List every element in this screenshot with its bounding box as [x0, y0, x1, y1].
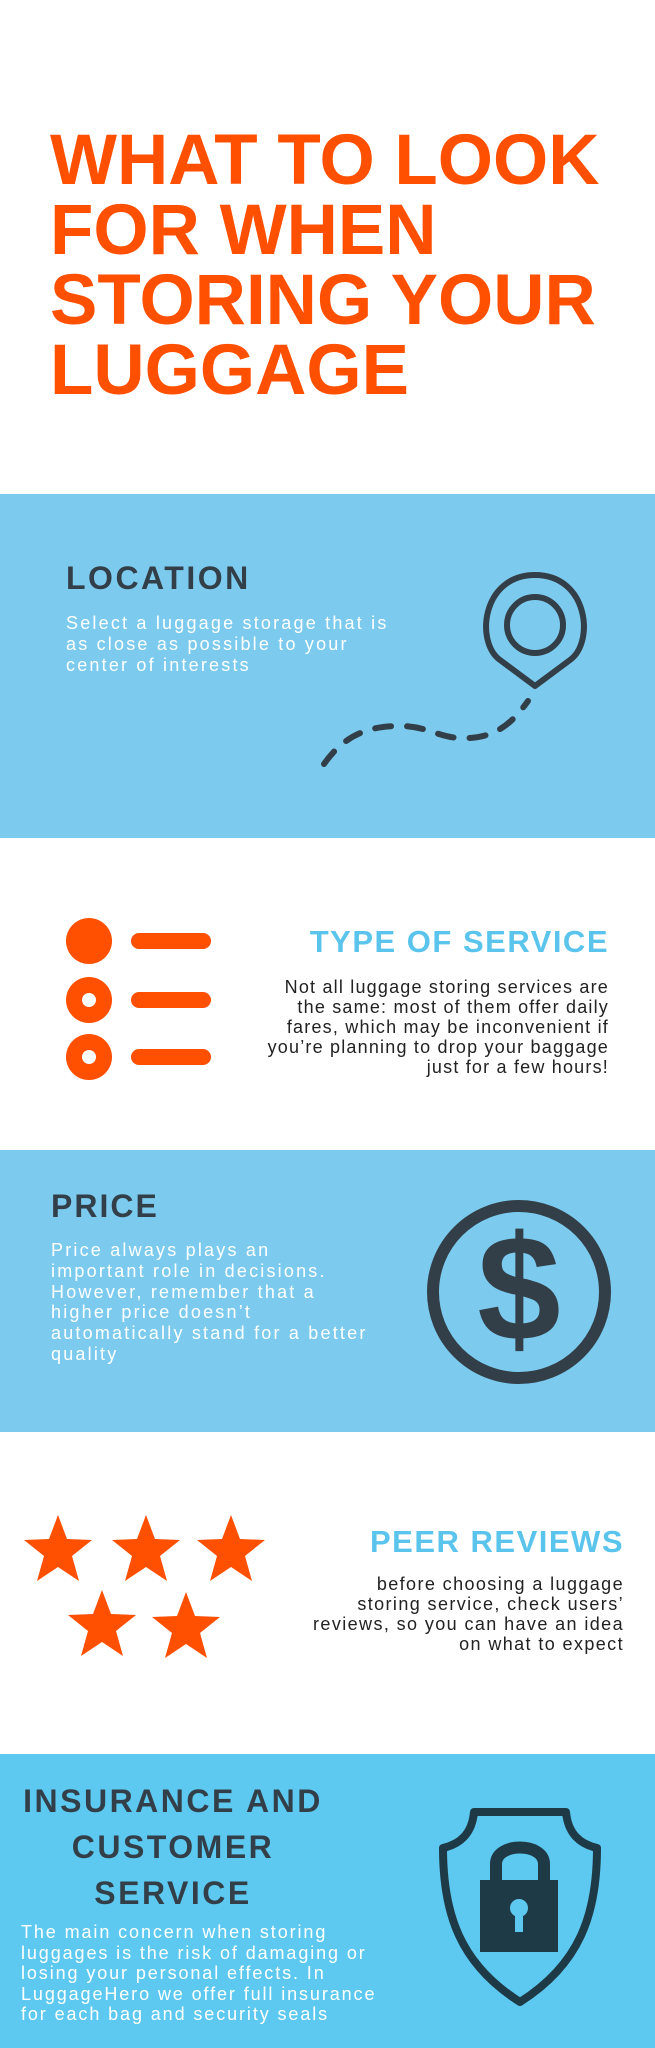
heading: insurance	[23, 1783, 323, 1911]
icon: stars	[24, 1515, 265, 1658]
icon: dollar: $	[477, 1204, 561, 1372]
text: peer reviews: reviews, so you can have an idea	[313, 1614, 624, 1634]
title: LUGGAGE	[50, 331, 409, 410]
title: WHAT TO LOOK	[50, 121, 600, 200]
text: location: as close as possible to your	[66, 634, 349, 654]
icon: dollar	[427, 1200, 611, 1384]
heading: type of service: TYPE OF SERVICE	[310, 924, 609, 959]
heading: price: PRICE	[51, 1188, 159, 1224]
panel: peer reviews	[0, 1432, 655, 1754]
heading: insurance: INSURANCE AND	[23, 1783, 323, 1819]
text: insurance: LuggageHero we offer full insurance	[21, 1984, 376, 2004]
text: insurance: losing your personal effects. In	[21, 1963, 326, 1983]
text: peer reviews: on what to expect	[459, 1634, 624, 1654]
text: price: important role in decisions.	[51, 1261, 327, 1281]
text: insurance: The main concern when storing	[21, 1922, 327, 1942]
panel: type of service	[0, 838, 655, 1150]
heading: insurance: SERVICE	[94, 1875, 252, 1911]
icon: map pin with dashed path	[321, 572, 587, 767]
icon: list	[66, 918, 211, 1080]
text: price: Price always plays an	[51, 1240, 270, 1260]
heading: peer reviews: PEER REVIEWS	[370, 1524, 624, 1559]
icon: shield with lock	[439, 1808, 601, 2006]
text: type of service: you’re planning to drop your baggage	[268, 1037, 609, 1057]
heading: location: LOCATION	[66, 560, 251, 596]
title: FOR WHEN	[50, 191, 437, 270]
text: price: However, remember that a	[51, 1282, 316, 1302]
panel: insurance	[0, 1754, 655, 2048]
panel: price	[0, 1150, 655, 1432]
text: peer reviews	[313, 1574, 624, 1654]
text: insurance	[21, 1922, 376, 2024]
text: price: higher price doesn’t	[51, 1302, 252, 1322]
text: location: Select a luggage storage that is	[66, 613, 389, 633]
heading: insurance: CUSTOMER	[72, 1829, 274, 1865]
text: type of service: just for a few hours!	[427, 1057, 609, 1077]
title: STORING YOUR	[50, 261, 596, 340]
text: location: center of interests	[66, 655, 251, 675]
text: price: quality	[51, 1344, 118, 1364]
text: insurance: luggages is the risk of damaging or	[21, 1943, 367, 1963]
text: insurance: for each bag and security seals	[21, 2004, 329, 2024]
panel: location	[0, 494, 655, 838]
text: type of service: fares, which may be inconvenient if	[287, 1017, 609, 1037]
text: type of service: the same: most of them offer daily	[297, 997, 609, 1017]
text: peer reviews: storing service, check users’	[357, 1594, 624, 1614]
text: type of service: Not all luggage storing services are	[285, 977, 609, 997]
text: location	[66, 613, 389, 675]
text: price: automatically stand for a better	[51, 1323, 368, 1343]
text: type of service	[268, 977, 609, 1077]
text: price	[51, 1240, 368, 1364]
text: peer reviews: before choosing a luggage	[377, 1574, 624, 1594]
title	[50, 121, 600, 410]
